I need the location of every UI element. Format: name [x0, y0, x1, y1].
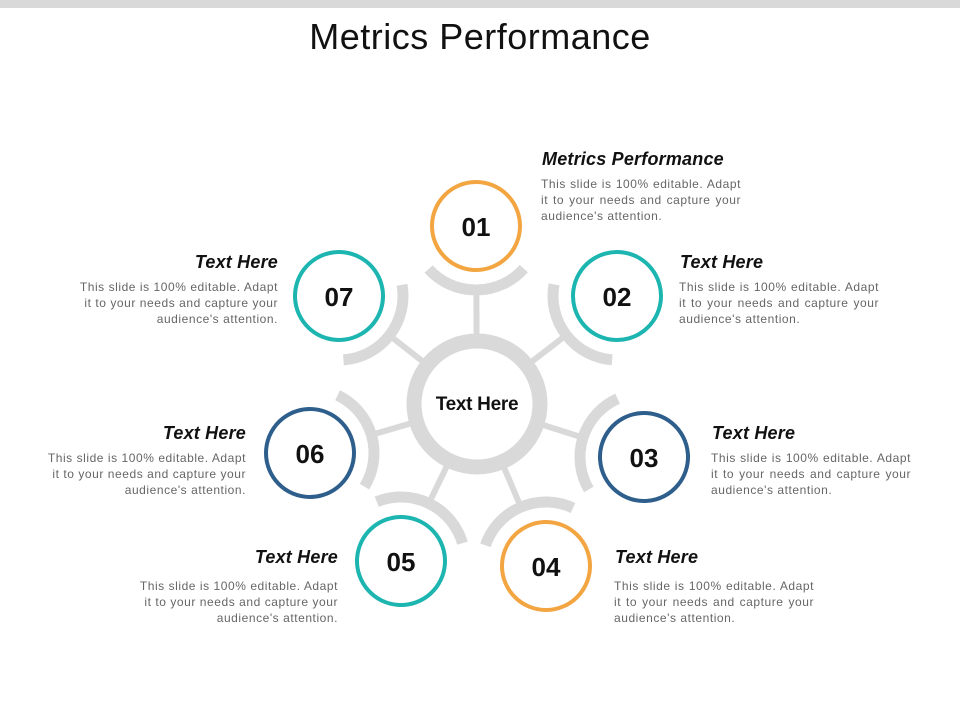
text: Text Here — [163, 423, 246, 443]
text 03 — [711, 423, 911, 497]
text: Text Here — [195, 252, 278, 272]
text: This slide is 100% editable. Adapt it to your needs and capture your audience's attention. — [614, 579, 814, 625]
text: Metrics Performance — [542, 149, 724, 169]
node 07: 07 — [325, 282, 353, 312]
text: Text Here — [615, 547, 698, 567]
hub — [414, 341, 540, 467]
text 04 — [614, 547, 814, 625]
text 01 — [541, 149, 741, 223]
node 04 — [460, 448, 607, 625]
node 06: 06 — [296, 439, 324, 469]
node 03: 03 — [630, 443, 658, 473]
node 05: 05 — [387, 547, 415, 577]
text: This slide is 100% editable. Adapt it to your needs and capture your audience's attention. — [48, 451, 246, 497]
text: Text Here — [680, 252, 763, 272]
text: This slide is 100% editable. Adapt it to your needs and capture your audience's attention. — [541, 177, 741, 223]
text: Text Here — [712, 423, 795, 443]
node 06 — [254, 377, 425, 511]
text: This slide is 100% editable. Adapt it to your needs and capture your audience's attention. — [80, 280, 278, 326]
node 01: 01 — [462, 212, 490, 242]
node 03 — [528, 379, 700, 516]
node 05 — [339, 445, 490, 621]
text 07 — [80, 252, 278, 326]
node 02: 02 — [603, 282, 631, 312]
text: This slide is 100% editable. Adapt it to your needs and capture your audience's attention. — [140, 579, 338, 625]
node 04: 04 — [532, 552, 561, 582]
text 05 — [140, 547, 338, 625]
node 02 — [502, 231, 681, 400]
text: This slide is 100% editable. Adapt it to your needs and capture your audience's attention. — [679, 280, 879, 326]
node 07 — [275, 231, 453, 399]
hub: Text Here — [436, 394, 518, 415]
text 06 — [48, 423, 246, 497]
title: Metrics Performance — [309, 16, 651, 57]
node 01 — [428, 182, 524, 336]
text: This slide is 100% editable. Adapt it to your needs and capture your audience's attention. — [711, 451, 911, 497]
text: Text Here — [255, 547, 338, 567]
text 02 — [679, 252, 879, 326]
